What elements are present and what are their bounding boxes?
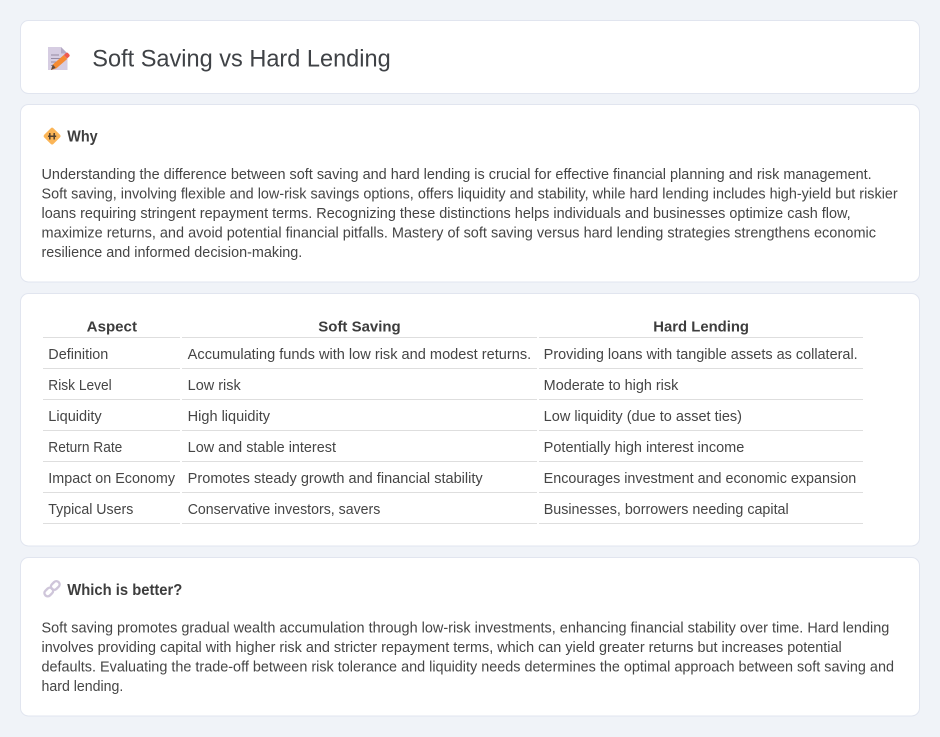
table row: return rate: Return Rate [48, 440, 122, 456]
table row: liquidity [43, 409, 863, 430]
text block: why paragraph: Understanding the difference between soft saving and hard lending is crucial for effective financial planning and risk management. [42, 167, 872, 183]
icon: chain link [43, 580, 61, 598]
table header row: Soft Saving [318, 320, 401, 336]
table row: definition: Providing loans with tangible assets as collateral. [544, 347, 858, 363]
table row: typical users: Businesses, borrowers needing capital [544, 502, 789, 518]
table header row: Aspect [87, 320, 137, 336]
heading: why: Why [67, 129, 98, 146]
table row: return rate [43, 440, 863, 462]
text block: why paragraph: resilience and informed decision-making. [42, 245, 302, 261]
text block: which is better paragraph [42, 620, 894, 695]
table row: definition: Accumulating funds with low risk and modest returns. [188, 347, 531, 363]
table row: definition [43, 347, 863, 368]
table header row: Hard Lending [653, 320, 749, 336]
table row: impact on economy: Encourages investment and economic expansion [544, 471, 856, 487]
panel: comparison table [20, 294, 920, 546]
text block: why paragraph: Soft saving, involving flexible and low-risk savings options, offers liquidity and stability, while hard lending includes high-yield but riskier [42, 186, 898, 202]
table row: liquidity: Low liquidity (due to asset ties) [544, 409, 742, 425]
table row: liquidity: Liquidity [48, 409, 103, 425]
table header row [43, 320, 863, 338]
table row: impact on economy: Promotes steady growth and financial stability [188, 471, 484, 487]
table row: return rate: Potentially high interest income [544, 440, 744, 456]
text block: why paragraph: maximize returns, and avoid potential financial pitfalls. Mastery of soft saving versus hard lending strategies strengthens economic [42, 226, 876, 242]
icon: document with pencil [48, 47, 70, 70]
table row: typical users: Conservative investors, savers [188, 502, 380, 518]
table row: impact on economy: Impact on Economy [48, 471, 176, 487]
table row: definition: Definition [48, 347, 108, 363]
panel: which is better [20, 558, 920, 716]
heading: which is better: Which is better? [67, 582, 182, 599]
text block: why paragraph: loans requiring stringent repayment terms. Recognizing these distinctions helps individuals and businesses optimize cash flow, [42, 206, 851, 222]
table row: risk level [43, 378, 863, 400]
text block: which is better paragraph: involves providing capital with higher risk and stricter repayment terms, which can yield greater returns but increases potential [42, 640, 842, 656]
icon: warning diamond [43, 127, 61, 145]
table row: risk level: Risk Level [48, 378, 112, 394]
table row: typical users: Typical Users [48, 502, 133, 518]
text block: which is better paragraph: Soft saving promotes gradual wealth accumulation through low-risk investments, enhancing financial stability over time. Hard lending [42, 620, 889, 636]
table row: impact on economy [43, 471, 863, 492]
panel: why [20, 104, 920, 282]
text block: why paragraph [42, 167, 898, 261]
panel: title header [20, 20, 920, 94]
text block: which is better paragraph: hard lending. [42, 679, 123, 695]
table row: typical users [43, 502, 863, 524]
title: Soft Saving vs Hard Lending [92, 46, 391, 73]
table row: liquidity: High liquidity [188, 409, 271, 425]
table row: return rate: Low and stable interest [188, 440, 336, 456]
table row: risk level: Low risk [188, 378, 242, 394]
text block: which is better paragraph: defaults. Evaluating the trade-off between risk tolerance and liquidity needs determines the optimal approach between soft saving and [42, 660, 894, 676]
table row: risk level: Moderate to high risk [544, 378, 679, 394]
